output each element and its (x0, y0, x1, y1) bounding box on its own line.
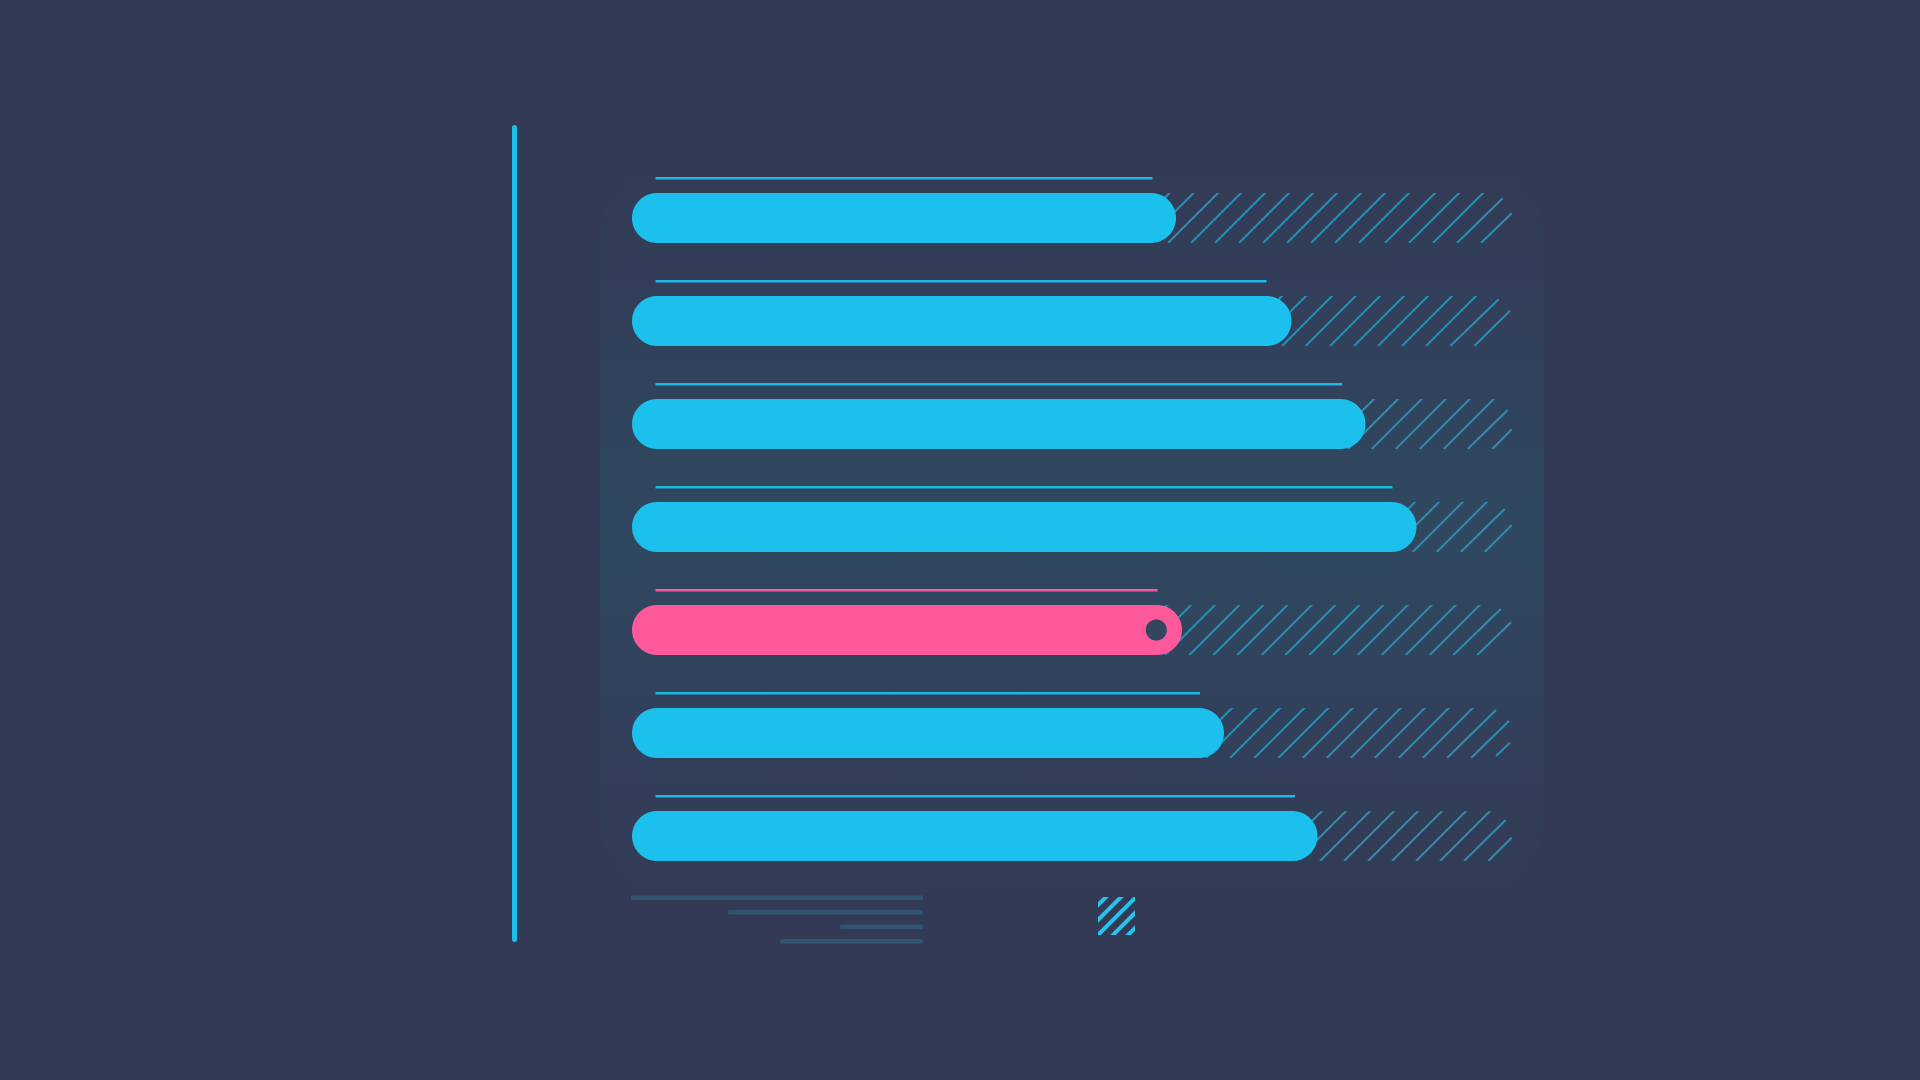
bar group: row 4 (632, 486, 1416, 552)
hatch: row 3 (1347, 399, 1512, 449)
hatch: row 1 (1164, 193, 1512, 243)
hatch: row 7 (1296, 811, 1512, 861)
bar: row 1 (632, 193, 1176, 243)
bar: row 6 (632, 708, 1224, 758)
hatched remainder tracks (1164, 193, 1512, 861)
panel: background glow (600, 145, 1544, 915)
bar group: row 5 highlighted (632, 589, 1182, 655)
footnote lines (631, 896, 923, 944)
hatch: row 6 (1182, 707, 1510, 758)
label line: row 1 (656, 177, 1152, 180)
hatch: row 2 (1278, 296, 1511, 346)
hatch: row 4 (1408, 502, 1512, 552)
bar: row 7 (632, 811, 1318, 861)
bar group: row 2 (632, 280, 1292, 346)
bar: row 2 (632, 296, 1292, 346)
bar: row 3 (632, 399, 1366, 449)
marker dot (1146, 619, 1167, 641)
infographic canvas (512, 125, 1544, 944)
vertical axis line (512, 125, 517, 942)
label line: row 5 (656, 589, 1158, 592)
label line: row 4 (656, 486, 1392, 488)
label line: row 7 (656, 795, 1295, 798)
bar: row 4 (632, 502, 1416, 552)
label line: row 2 (656, 280, 1266, 282)
legend icon: hatch swatch (1098, 897, 1135, 935)
bar: row 5 highlighted (632, 605, 1182, 655)
bar group: row 1 (632, 177, 1176, 243)
label line: row 3 (656, 383, 1342, 386)
bar group: row 6 (632, 692, 1224, 758)
hatch: row 5 (1164, 605, 1512, 655)
bar group: row 7 (632, 795, 1318, 861)
bar group: row 3 (632, 383, 1366, 449)
label line: row 6 (656, 692, 1200, 694)
